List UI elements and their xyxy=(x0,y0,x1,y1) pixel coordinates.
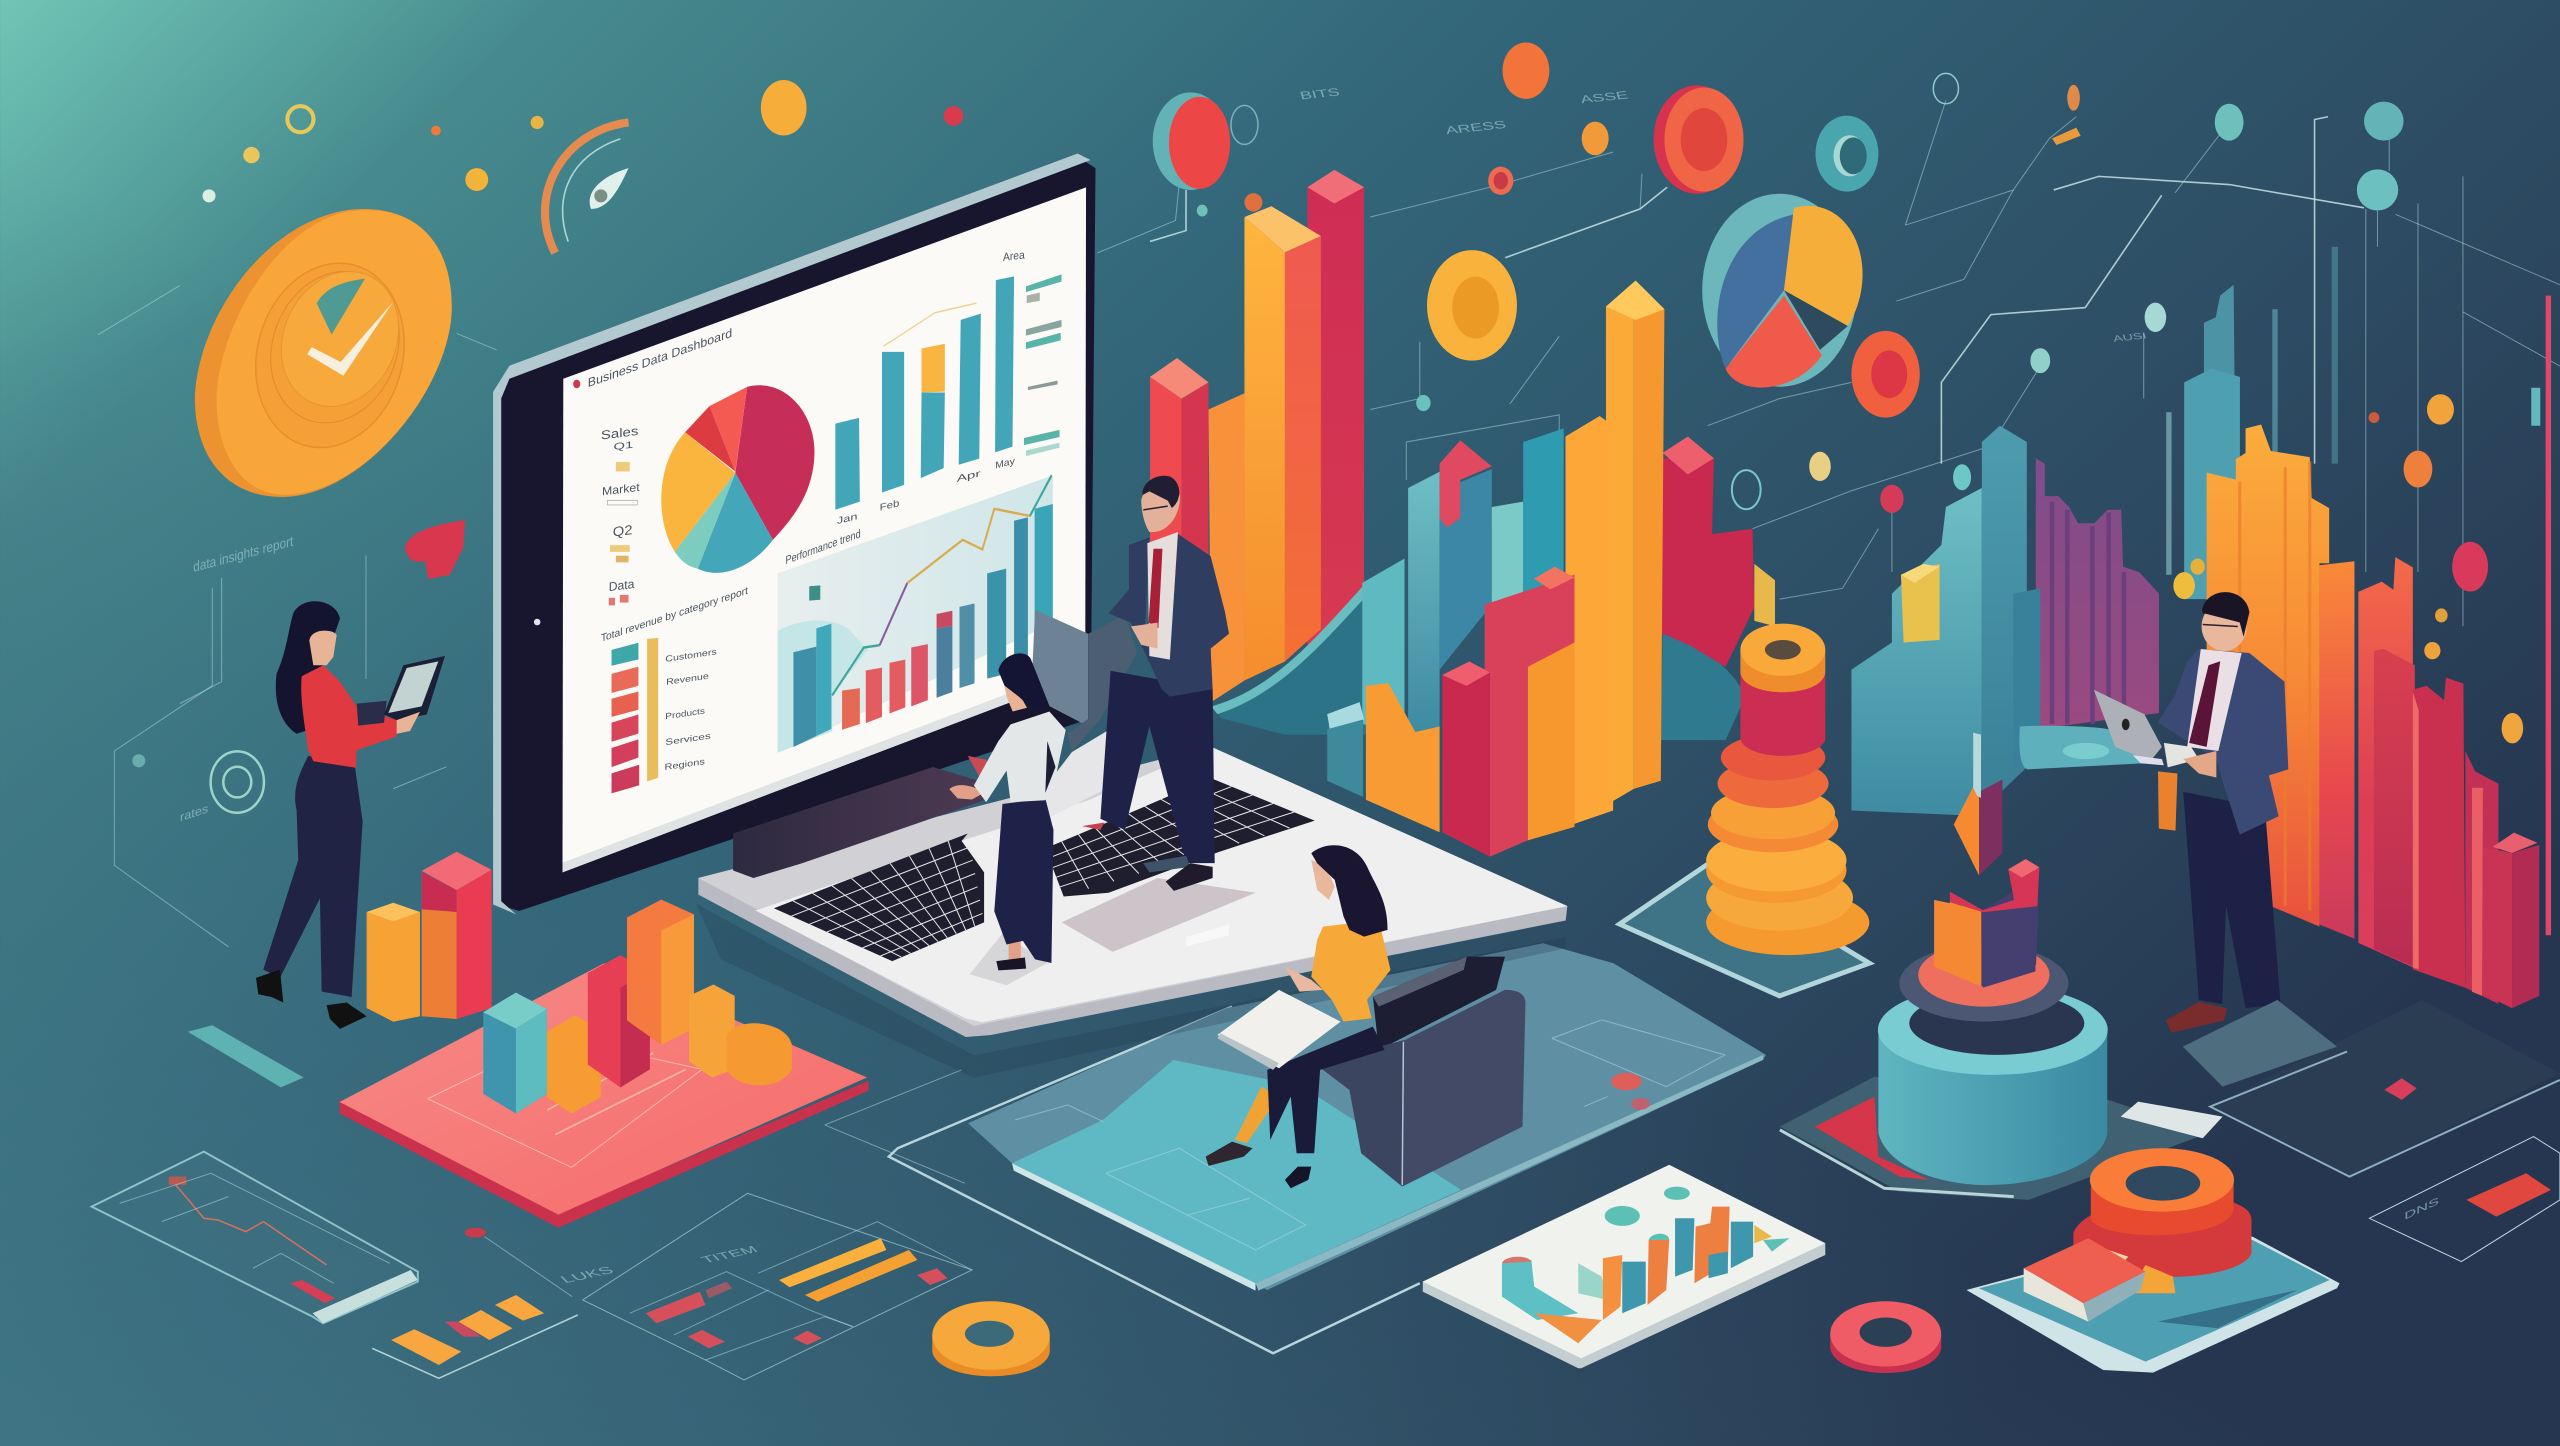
bars panel: TITEM xyxy=(698,1244,761,1265)
top bar chart: Jan xyxy=(837,510,858,526)
man: center standing xyxy=(1031,476,1229,891)
small chart panel xyxy=(2369,1137,2560,1262)
small red ring xyxy=(1488,167,1513,195)
top bar chart: Area xyxy=(1003,249,1025,264)
man: right with laptop xyxy=(2019,592,2288,1040)
teal floor slab xyxy=(1012,1020,1763,1291)
panel outline xyxy=(889,1007,1420,1353)
laptop xyxy=(696,747,1567,1078)
bottom-left analytics panels xyxy=(92,1070,972,1380)
small outlined ring xyxy=(1231,105,1258,144)
central bar cluster xyxy=(1327,280,1775,857)
left small chart lines xyxy=(114,751,304,1087)
ranked list xyxy=(601,585,748,793)
woman: center standing xyxy=(949,653,1066,985)
orange ring xyxy=(932,1301,1050,1376)
faint scribbled notes: data insights report xyxy=(193,532,294,576)
icon: orange check coin xyxy=(195,209,452,497)
phone line chart xyxy=(92,1152,418,1323)
tablet with books and orange ring xyxy=(1966,1148,2340,1373)
bars panel xyxy=(558,1193,972,1380)
floating coins and discs xyxy=(1153,43,2523,743)
small labels: ASSE xyxy=(1579,90,1630,106)
red ring right of pie xyxy=(1851,331,1920,418)
red platform with bars xyxy=(340,900,869,1228)
icon: gauge swirl xyxy=(545,122,629,253)
pie disc xyxy=(1702,194,1863,388)
platform behind cylinder xyxy=(1780,1077,2223,1200)
teal ring xyxy=(1815,116,1878,192)
grey box xyxy=(1031,610,1137,752)
top-left floating dots xyxy=(202,80,963,202)
woman: left with tablet xyxy=(256,601,445,1029)
orange bars xyxy=(2207,424,2329,927)
small chart panel: DNS xyxy=(2404,1195,2439,1222)
red ring xyxy=(1830,1301,1941,1373)
dark right panel xyxy=(2183,1000,2560,1177)
keyboard right xyxy=(1045,778,1315,896)
top bar chart: Apr xyxy=(957,468,981,484)
pie legend: Market xyxy=(602,481,640,499)
small labels: BITS xyxy=(1299,87,1341,102)
monitor screen xyxy=(562,187,1086,872)
pie legend: Q1 xyxy=(614,439,633,452)
bars beside woman xyxy=(367,852,492,1022)
right staircase bars xyxy=(2207,424,2539,1008)
seated woman and chair xyxy=(1206,845,1525,1188)
cylinder stage xyxy=(1878,900,2108,1185)
ranked list: Services xyxy=(665,731,711,747)
disc: red with teal rim xyxy=(1153,92,1230,190)
ranked list: Revenue xyxy=(666,671,710,687)
translucent slab xyxy=(968,943,1766,1290)
trackpad xyxy=(1062,878,1256,952)
icon: target ring xyxy=(211,751,264,813)
small labels: ARESS xyxy=(1444,119,1508,137)
top bar chart: May xyxy=(995,455,1016,471)
line and bar chart xyxy=(778,475,1053,753)
back teal bars xyxy=(2184,285,2240,599)
pie chart xyxy=(661,385,814,573)
large floor panel xyxy=(889,943,1766,1353)
teal tile behind man xyxy=(2019,726,2144,769)
ranked list: Regions xyxy=(665,757,705,772)
chair xyxy=(1314,957,1525,1187)
purple bars xyxy=(2036,458,2159,729)
red orange bars xyxy=(2319,557,2539,1008)
coin: orange red top xyxy=(1503,43,1549,99)
pie legend: Data xyxy=(609,578,635,594)
decorative connector lines upper area xyxy=(98,101,2560,935)
small teal and orange dots xyxy=(1197,73,2523,743)
screen title: Business Data Dashboard xyxy=(588,326,732,390)
bars panel: LUKS xyxy=(558,1265,617,1285)
laptop hinge, people on laptop xyxy=(733,476,1229,985)
platform bars xyxy=(483,900,792,1113)
faint scribbled notes: rates xyxy=(180,803,208,825)
top bar chart: Feb xyxy=(880,497,899,513)
orange coin xyxy=(1427,250,1517,361)
laptop base xyxy=(698,747,1567,1037)
faint scribbled notes xyxy=(180,333,497,825)
left column illustrations xyxy=(180,209,497,1029)
orange blocks panel xyxy=(372,1295,578,1378)
big red ring xyxy=(1654,85,1744,194)
screen title xyxy=(573,326,732,390)
white card with mini chart xyxy=(1423,1165,1825,1368)
icon: small red heart xyxy=(405,520,465,579)
ranked list: Customers xyxy=(665,647,717,664)
small red dot xyxy=(465,1228,486,1238)
pie legend xyxy=(601,425,640,605)
teal swoosh xyxy=(1211,588,1366,735)
ranked list: Total revenue by category report xyxy=(601,585,748,645)
laptop shadow xyxy=(696,904,1566,1078)
small labels: AUSI xyxy=(2112,330,2148,344)
coin stack xyxy=(1620,624,1869,996)
central and right bars with floating discs xyxy=(1150,43,2523,857)
ranked list: Products xyxy=(665,706,705,721)
deck behind people xyxy=(1039,730,1113,819)
line and bar chart: Performance trend xyxy=(786,527,861,567)
monitor xyxy=(493,153,1096,914)
keyboard left xyxy=(774,834,984,961)
cube with fin on cylinder xyxy=(1950,733,2039,988)
small labels xyxy=(1299,87,2148,344)
side legend strips xyxy=(1024,274,1062,456)
pie legend: Sales xyxy=(601,425,639,443)
teal bars left of purple xyxy=(1851,426,2040,816)
tall red and orange bars xyxy=(1150,170,1364,702)
monitor bezel xyxy=(495,157,1096,911)
top bar chart xyxy=(835,249,1025,526)
bottom right scene xyxy=(1780,900,2560,1373)
monitor stand xyxy=(733,767,994,878)
pie legend: Q2 xyxy=(613,522,633,540)
